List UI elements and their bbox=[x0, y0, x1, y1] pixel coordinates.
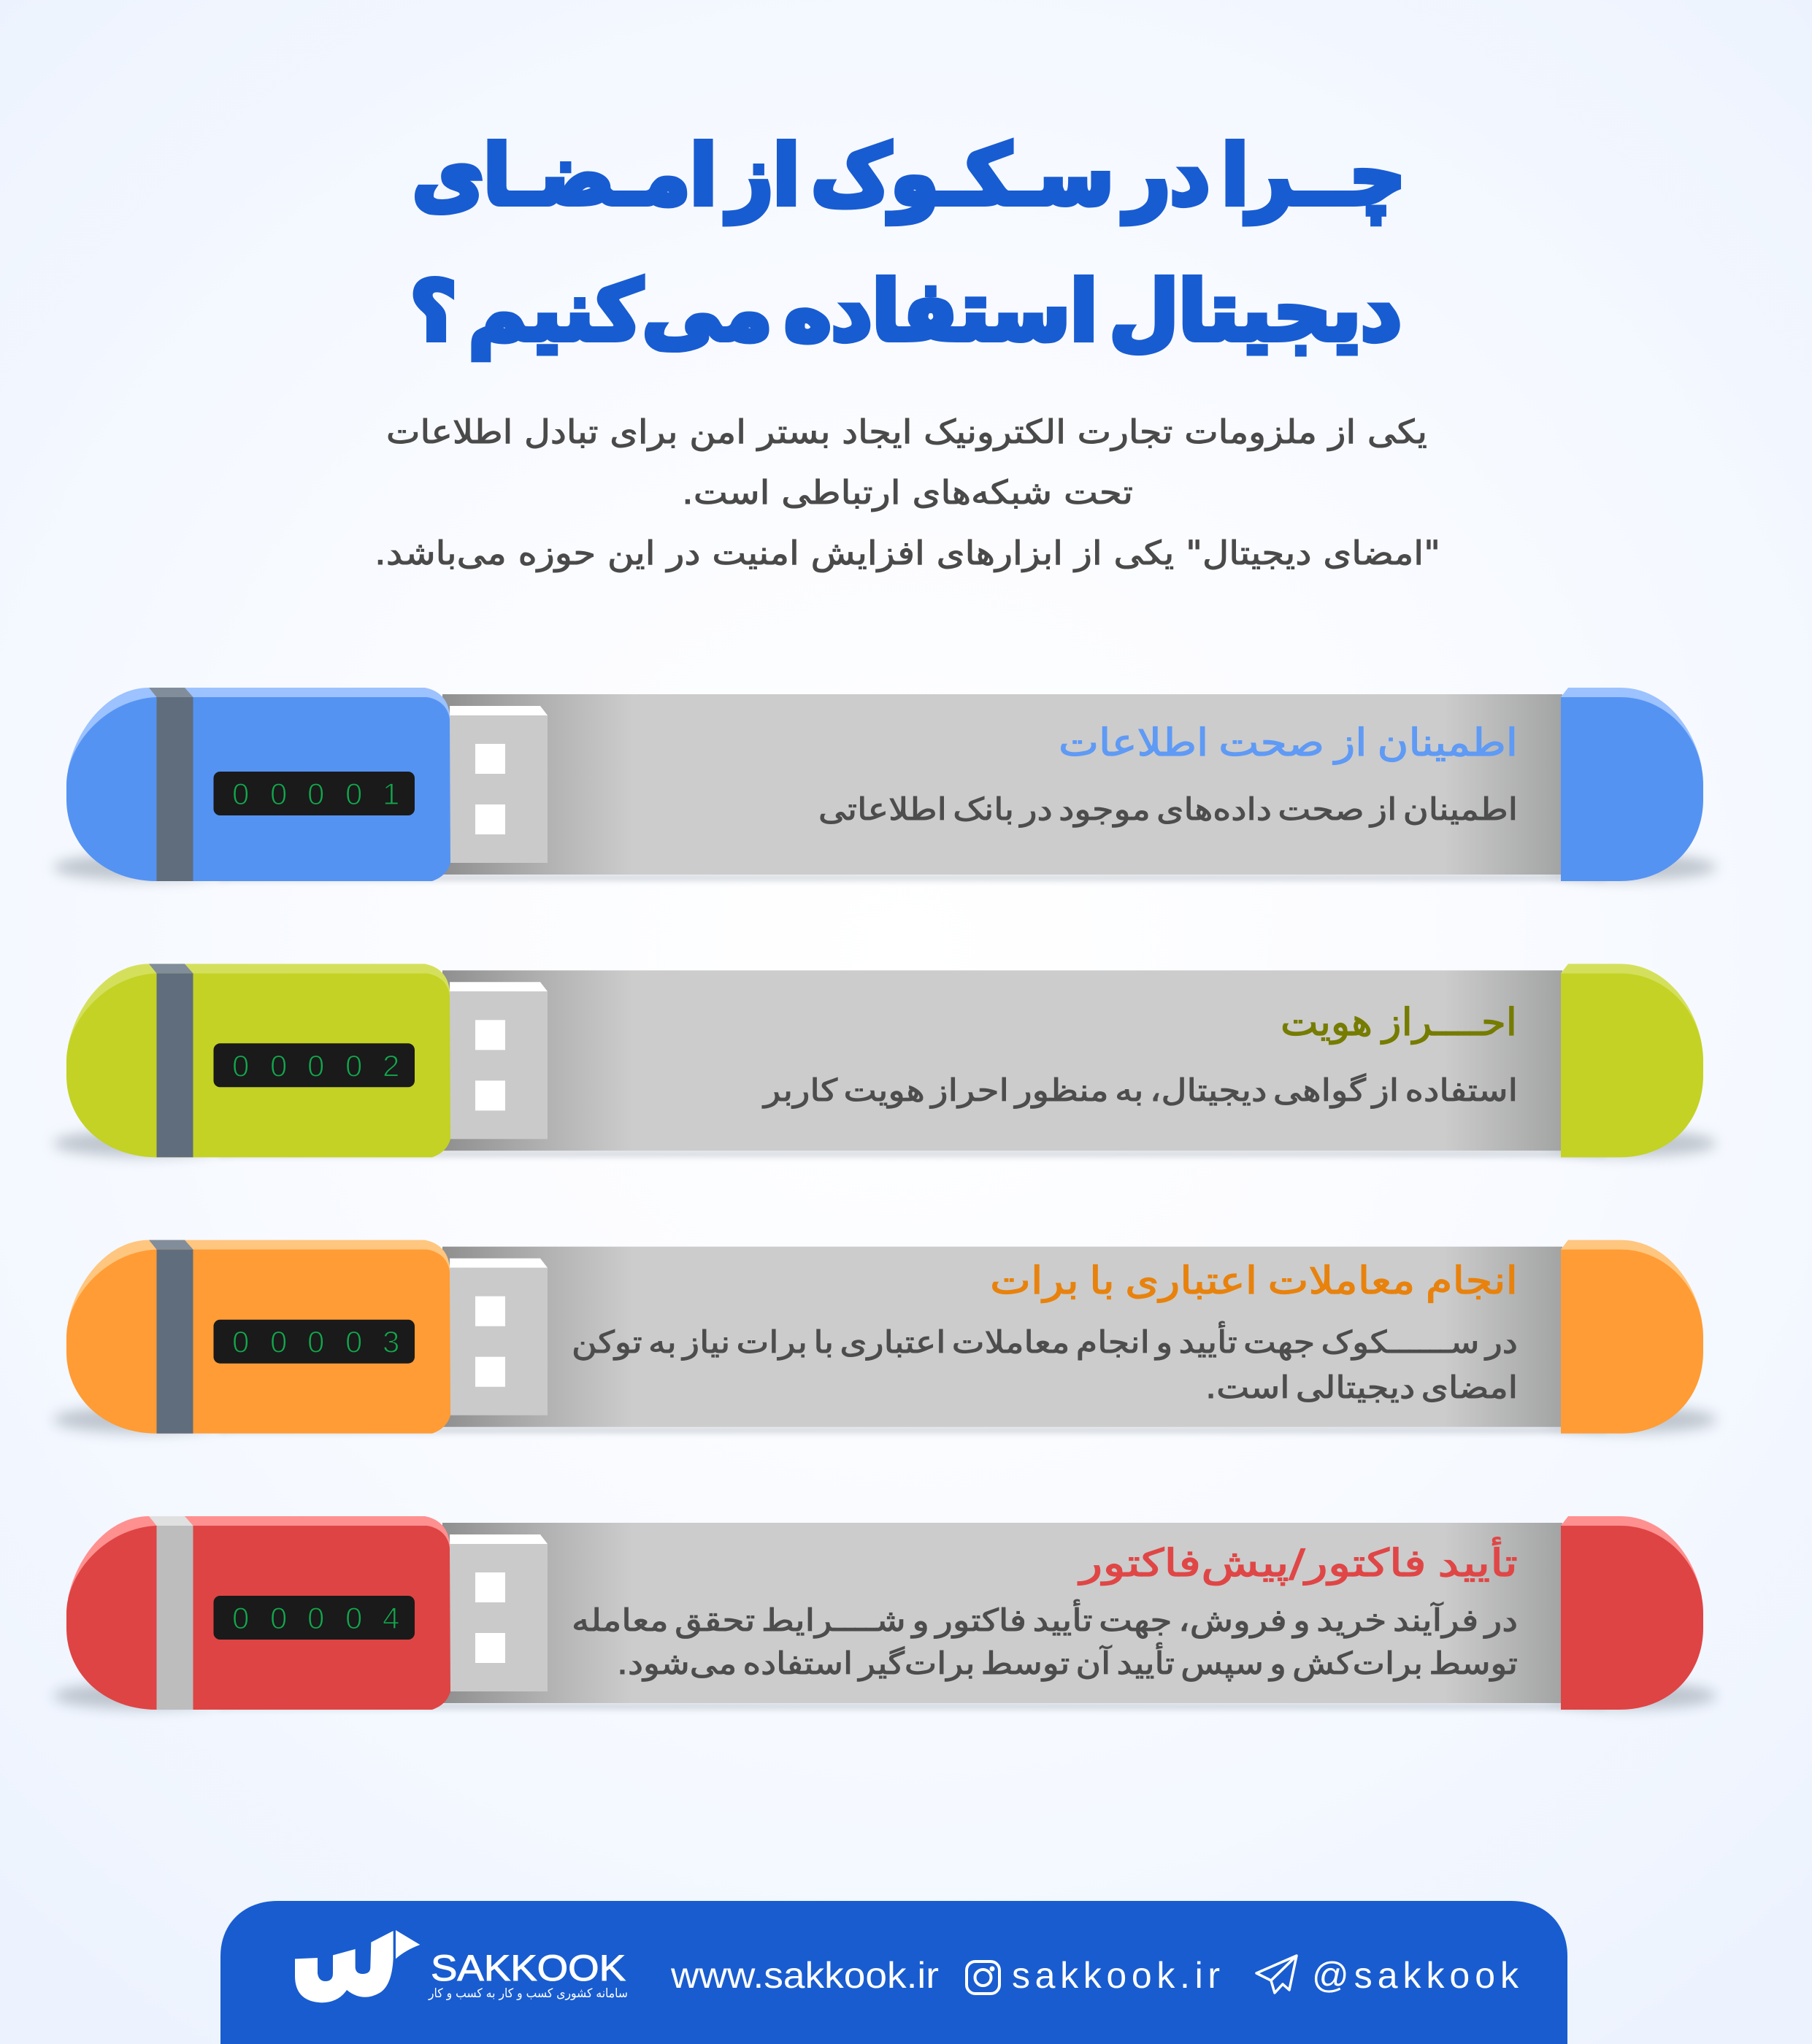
instagram handle: sakkook.ir bbox=[1012, 1955, 1220, 1996]
row 3 body: امضای دیجیتالی است. bbox=[1205, 1369, 1518, 1405]
panel: footer bbox=[220, 1901, 1567, 2044]
intro text: "امضای دیجیتال" یکی از ابزارهای افزایش امنیت در این حوزه می‌باشد. bbox=[375, 534, 1440, 572]
row 2 shadow bbox=[53, 1130, 1716, 1157]
row 3 counter display: 00003 bbox=[232, 1325, 399, 1359]
row 3 heading: انجام معاملات اعتباری با برات bbox=[990, 1259, 1518, 1303]
row 2 body: استفاده از گواهی دیجیتال، به منظور احراز هویت کاربر bbox=[762, 1072, 1518, 1108]
brand tagline: سامانه کشوری کسب و کار به کسب و کار bbox=[428, 1986, 628, 2001]
brand name: SAKKOOK bbox=[431, 1948, 626, 1989]
row 4 shadow bbox=[53, 1683, 1716, 1710]
title: دیجیتال استفاده می‌کنیم ؟ bbox=[410, 264, 1402, 360]
row 2 heading: احــــراز هویت bbox=[1281, 1001, 1517, 1045]
row 4 heading: تأیید فاکتور/پیش‌فاکتور bbox=[1077, 1537, 1518, 1586]
row 4 body bbox=[572, 1599, 1518, 1682]
row 1 counter display: 00001 bbox=[232, 777, 399, 811]
row 4 usb plug bbox=[450, 1534, 548, 1691]
panel: row 3 usb token bbox=[53, 1240, 1716, 1434]
title: چــرا در سـکـوک از امـضـای bbox=[412, 128, 1405, 224]
row 1 heading: اطمینان از صحت اطلاعات bbox=[1059, 721, 1518, 765]
row 3 body bbox=[572, 1321, 1518, 1405]
panel: row 1 usb token bbox=[53, 688, 1716, 881]
panel: row 4 usb token bbox=[53, 1516, 1716, 1710]
icon: instagram bbox=[967, 1962, 999, 1994]
row 2 right cap bbox=[1561, 964, 1703, 1157]
row 3 body: در ســــــکوک جهت تأیید و انجام معاملات اعتباری با برات نیاز به توکن bbox=[572, 1321, 1518, 1361]
row 4 body: توسط برات‌کش و سپس تأیید آن توسط برات‌گیر استفاده می‌شود. bbox=[617, 1642, 1518, 1682]
row 2 counter display bbox=[213, 1043, 415, 1087]
row 4 counter display bbox=[213, 1596, 415, 1640]
row 2 counter display: 00002 bbox=[232, 1048, 399, 1083]
row 1 counter display bbox=[213, 772, 415, 815]
row 3 counter display bbox=[213, 1320, 415, 1364]
icon: telegram plane bbox=[1256, 1956, 1297, 1993]
row 4 right cap bbox=[1561, 1516, 1703, 1710]
row 3 gray bar bbox=[442, 1247, 1562, 1427]
panel: row 2 usb token bbox=[53, 964, 1716, 1157]
row 4 left cap bbox=[66, 1516, 450, 1710]
row 3 right cap bbox=[1561, 1240, 1703, 1434]
row 1 body: اطمینان از صحت داده‌های موجود در بانک اطلاعاتی bbox=[818, 791, 1518, 827]
row 1 right cap bbox=[1561, 688, 1703, 881]
website: www.sakkook.ir bbox=[670, 1955, 939, 1996]
row 2 left cap bbox=[66, 964, 450, 1157]
row 1 left cap bbox=[66, 688, 450, 881]
icon: sakkook logo bbox=[295, 1930, 420, 2002]
row 2 usb plug bbox=[450, 982, 548, 1139]
telegram handle: @sakkook bbox=[1312, 1955, 1519, 1996]
row 2 gray bar bbox=[442, 970, 1562, 1150]
intro text: یکی از ملزومات تجارت الکترونیک ایجاد بستر امن برای تبادل اطلاعات bbox=[386, 412, 1427, 452]
footer background bbox=[220, 1901, 1567, 2044]
row 1 shadow bbox=[53, 854, 1716, 881]
intro text bbox=[375, 412, 1440, 572]
row 3 usb plug bbox=[450, 1259, 548, 1415]
row 3 shadow bbox=[53, 1407, 1716, 1434]
row 4 gray bar bbox=[442, 1523, 1562, 1703]
row 4 counter display: 00004 bbox=[232, 1601, 399, 1635]
intro text: تحت شبکه‌های ارتباطی است. bbox=[682, 473, 1133, 512]
row 1 gray bar bbox=[442, 694, 1562, 875]
row 4 body: در فرآیند خرید و فروش، جهت تأیید فاکتور و شــــرایط تحقق معامله bbox=[572, 1599, 1518, 1639]
row 3 left cap bbox=[66, 1240, 450, 1434]
row 1 usb plug bbox=[450, 706, 548, 863]
title bbox=[410, 128, 1405, 360]
